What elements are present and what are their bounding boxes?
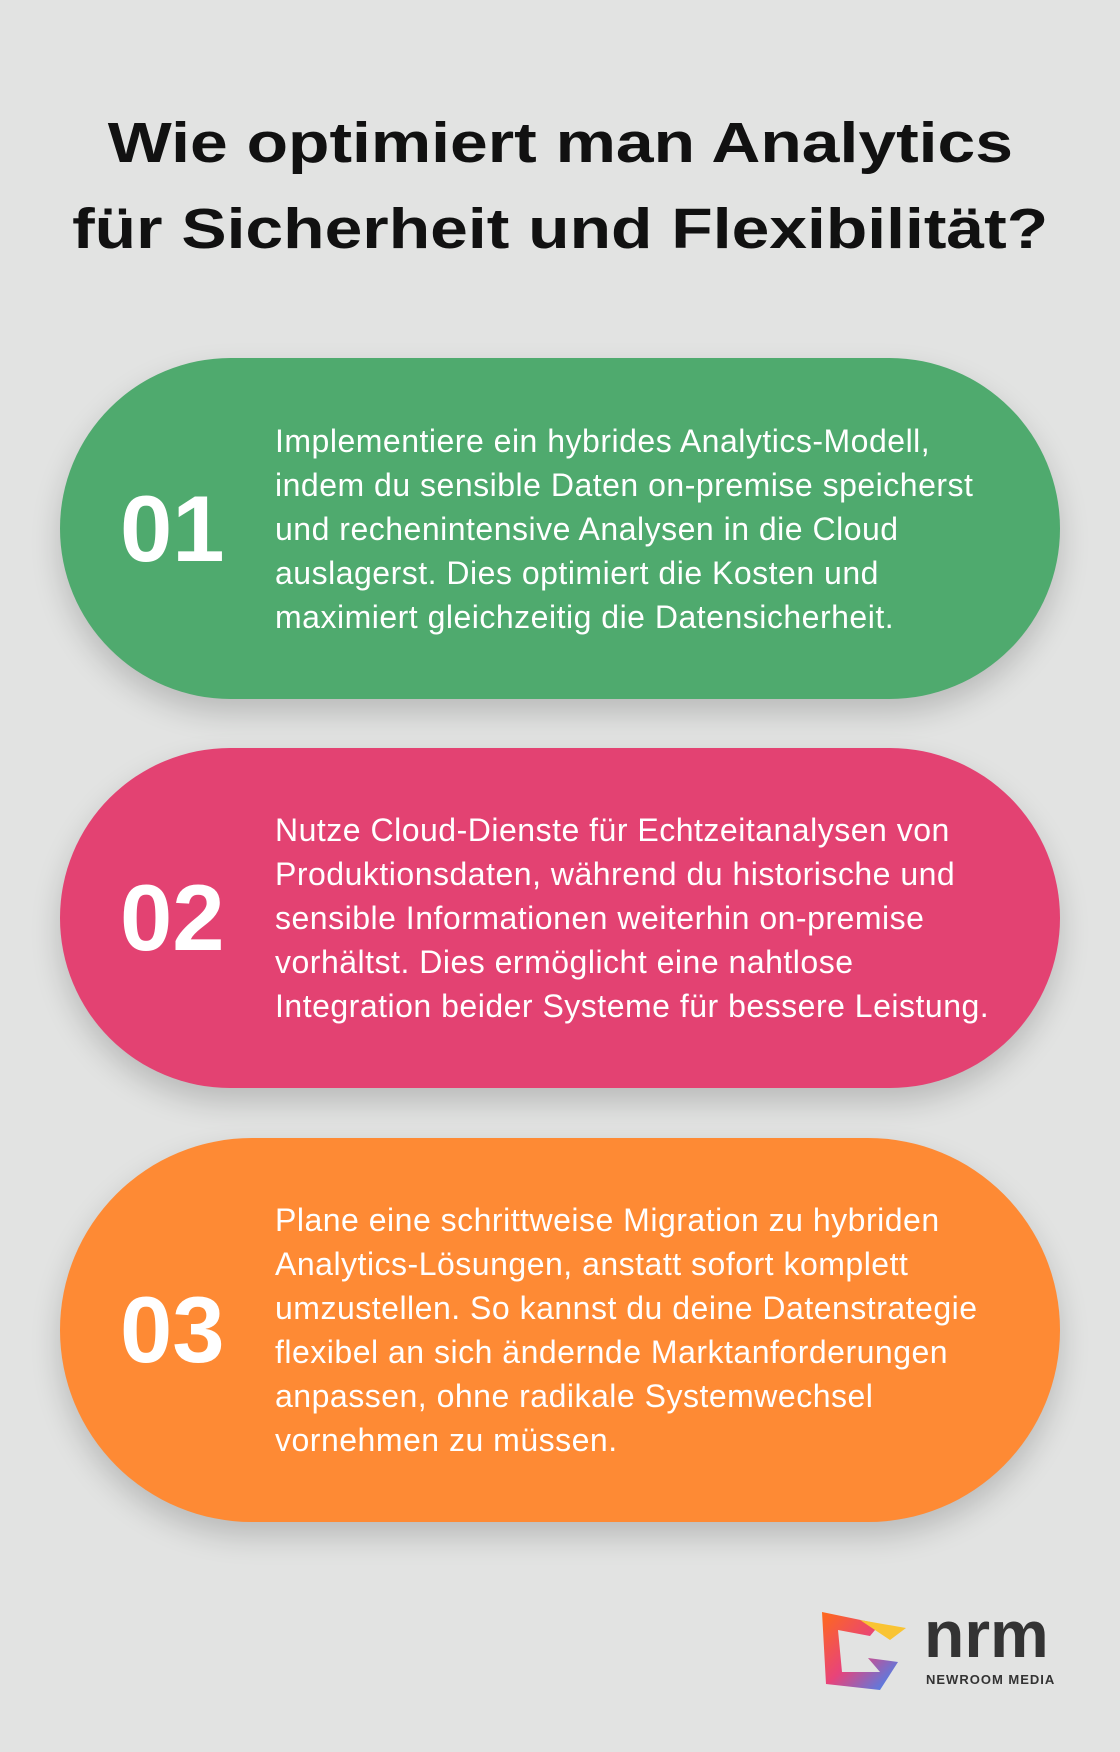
text 03: flexibel an sich ändernde Marktanforderungen <box>275 1334 948 1370</box>
title: für Sicherheit und Flexibilität? <box>72 197 1048 261</box>
text 02 <box>275 812 989 1024</box>
panel: step 01 <box>60 358 1060 699</box>
title: Wie optimiert man Analytics <box>107 111 1013 175</box>
panel: step 02 <box>60 748 1060 1088</box>
text 01: maximiert gleichzeitig die Datensicherheit. <box>275 598 894 634</box>
text 03 <box>275 1202 978 1458</box>
text 03: Analytics-Lösungen, anstatt sofort komplett <box>275 1246 908 1282</box>
text 03: anpassen, ohne radikale Systemwechsel <box>275 1378 873 1414</box>
text 01: indem du sensible Daten on-premise speicherst <box>275 466 973 502</box>
text 01 <box>275 422 973 634</box>
number 03: 03 <box>120 1277 225 1382</box>
text 01: Implementiere ein hybrides Analytics-Modell, <box>275 422 930 458</box>
text 02: vorhältst. Dies ermöglicht eine nahtlose <box>275 944 854 980</box>
logo: NEWROOM MEDIA <box>926 1672 1055 1687</box>
number 01: 01 <box>120 476 225 580</box>
text 01: und rechenintensive Analysen in die Cloud <box>275 510 899 546</box>
text 02: Nutze Cloud-Dienste für Echtzeitanalysen von <box>275 812 950 848</box>
icon: logo mark <box>822 1612 906 1690</box>
text 02: Produktionsdaten, während du historische und <box>275 856 955 892</box>
text 03: vornehmen zu müssen. <box>275 1422 618 1458</box>
logo <box>822 1597 1055 1690</box>
text 03: umzustellen. So kannst du deine Datenstrategie <box>275 1290 978 1326</box>
logo text: nrm <box>924 1597 1049 1671</box>
title <box>72 111 1048 261</box>
panel: step 03 <box>60 1138 1060 1522</box>
text 02: sensible Informationen weiterhin on-premise <box>275 900 924 936</box>
text 01: auslagerst. Dies optimiert die Kosten und <box>275 554 879 590</box>
text 02: Integration beider Systeme für bessere Leistung. <box>275 988 989 1024</box>
number 02: 02 <box>120 865 225 970</box>
text 03: Plane eine schrittweise Migration zu hybriden <box>275 1202 940 1238</box>
